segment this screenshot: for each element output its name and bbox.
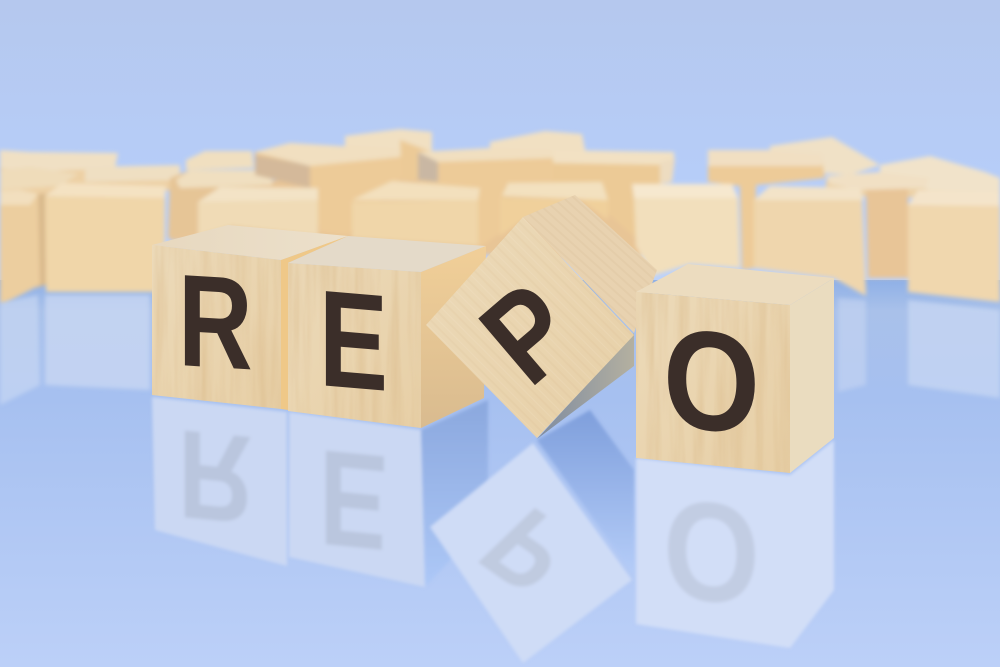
- E block right face: [421, 246, 486, 428]
- letter R: R: [178, 247, 253, 398]
- block 708-820: [708, 160, 825, 270]
- far row tops: [0, 150, 118, 172]
- block R: [152, 225, 348, 410]
- block P tilted: [426, 195, 657, 439]
- P block underside: [537, 333, 634, 439]
- blurred reflections of the background blocks: [0, 295, 1000, 405]
- R block side sliver: [281, 236, 348, 410]
- block 418-555: [418, 150, 555, 247]
- reflection letter E: E: [319, 421, 388, 580]
- reflection: P block: [430, 410, 634, 663]
- reflection: R block: [152, 397, 287, 566]
- O block right face: [790, 278, 834, 473]
- E block top face: [288, 236, 486, 272]
- reflection letter O: O: [663, 470, 760, 636]
- O block top face: [636, 264, 834, 305]
- reflection: O block: [636, 440, 834, 648]
- big block 255-405: [255, 143, 404, 235]
- background wall: [0, 0, 1000, 290]
- E block front face: [288, 263, 421, 428]
- reflective table surface: [0, 280, 1000, 667]
- block 555-675: [553, 160, 660, 242]
- P block front face: [426, 217, 634, 438]
- O block front face: [636, 292, 790, 473]
- reflection letter P: P: [455, 487, 601, 614]
- block E: [288, 236, 486, 428]
- shared shadowed backing behind the rows: [170, 165, 640, 262]
- block 828-930: [860, 188, 908, 278]
- block 85-180: [85, 165, 180, 182]
- reflection letter R: R: [178, 403, 253, 550]
- R block front face: [152, 245, 281, 409]
- letter P: P: [455, 256, 601, 410]
- reflection: E block: [289, 400, 488, 587]
- front row: [0, 192, 40, 303]
- block O: [636, 264, 834, 473]
- P block top face: [523, 195, 657, 333]
- R block top face: [152, 225, 348, 260]
- letter O: O: [663, 299, 760, 465]
- letter E: E: [319, 261, 388, 420]
- block 168-270: [168, 170, 272, 238]
- blurred background blocks: [0, 129, 1000, 303]
